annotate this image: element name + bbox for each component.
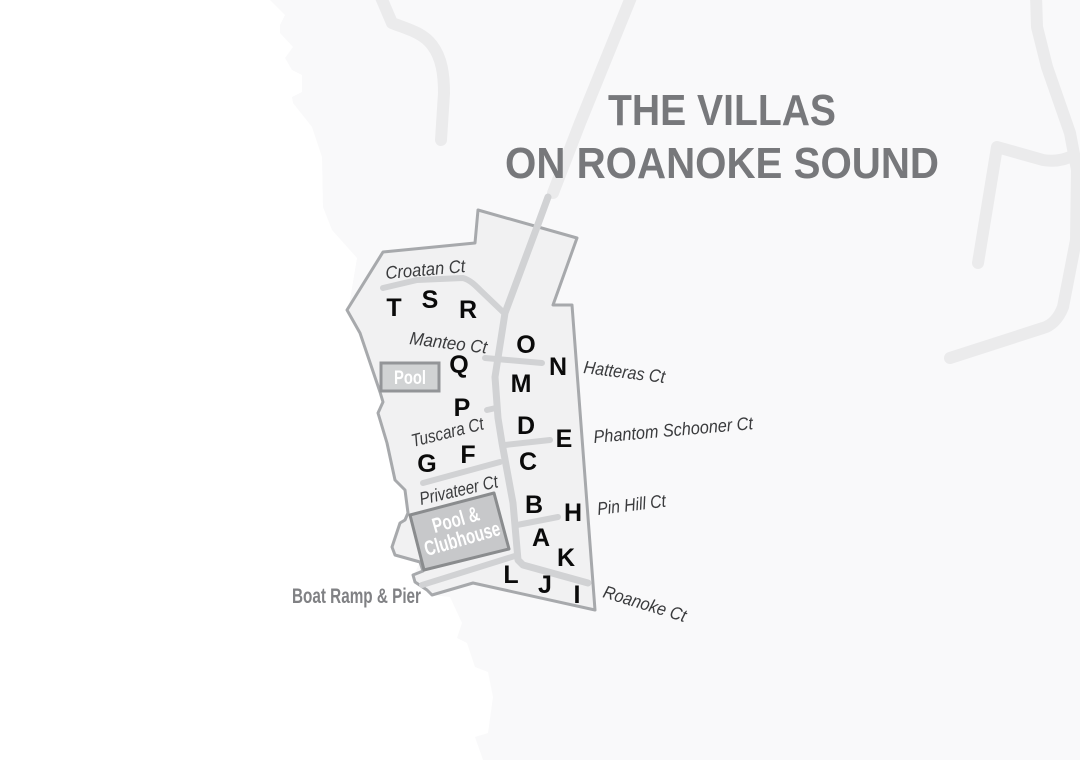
pool and clubhouse: Clubhouse — [422, 517, 503, 561]
background roads — [380, 0, 1077, 358]
unit letters: Q — [449, 351, 469, 379]
street labels: Phantom Schooner Ct — [593, 413, 755, 447]
boat ramp label: Boat Ramp & Pier — [292, 585, 421, 608]
unit letters: H — [564, 499, 582, 527]
community boundary — [347, 210, 595, 610]
unit letters: E — [556, 425, 572, 453]
title — [505, 86, 939, 188]
unit letters: P — [454, 394, 470, 422]
street labels: Privateer Ct — [417, 471, 501, 509]
street labels: Pin Hill Ct — [596, 491, 668, 519]
unit letters: F — [460, 441, 476, 469]
pool — [381, 363, 439, 391]
street labels — [385, 256, 755, 626]
unit letters: R — [459, 296, 477, 324]
unit letters: S — [422, 286, 438, 314]
street labels: Tuscara Ct — [409, 413, 487, 451]
title: THE VILLAS — [608, 86, 836, 135]
street labels: Croatan Ct — [385, 256, 467, 283]
unit letters: J — [538, 571, 552, 599]
unit letters: O — [516, 331, 536, 359]
unit letters: T — [386, 294, 402, 322]
unit letters: K — [557, 544, 575, 572]
unit letters: C — [519, 448, 537, 476]
land background — [270, 0, 1080, 760]
title: ON ROANOKE SOUND — [505, 139, 939, 188]
street labels: Roanoke Ct — [601, 582, 690, 626]
unit letters: D — [517, 412, 535, 440]
street labels: Manteo Ct — [409, 328, 489, 358]
pool and clubhouse — [410, 493, 509, 570]
unit letters: M — [511, 370, 531, 398]
unit letters: A — [532, 524, 550, 552]
pool: Pool — [394, 368, 426, 389]
unit letters: B — [525, 491, 543, 519]
unit letters: G — [417, 450, 437, 478]
unit letters: I — [574, 581, 580, 609]
community roads — [383, 197, 588, 585]
pool and clubhouse: Pool & — [430, 503, 482, 538]
unit letters — [386, 286, 582, 609]
unit letters: N — [549, 353, 567, 381]
unit letters: L — [503, 561, 519, 589]
street labels: Hatteras Ct — [583, 357, 667, 387]
